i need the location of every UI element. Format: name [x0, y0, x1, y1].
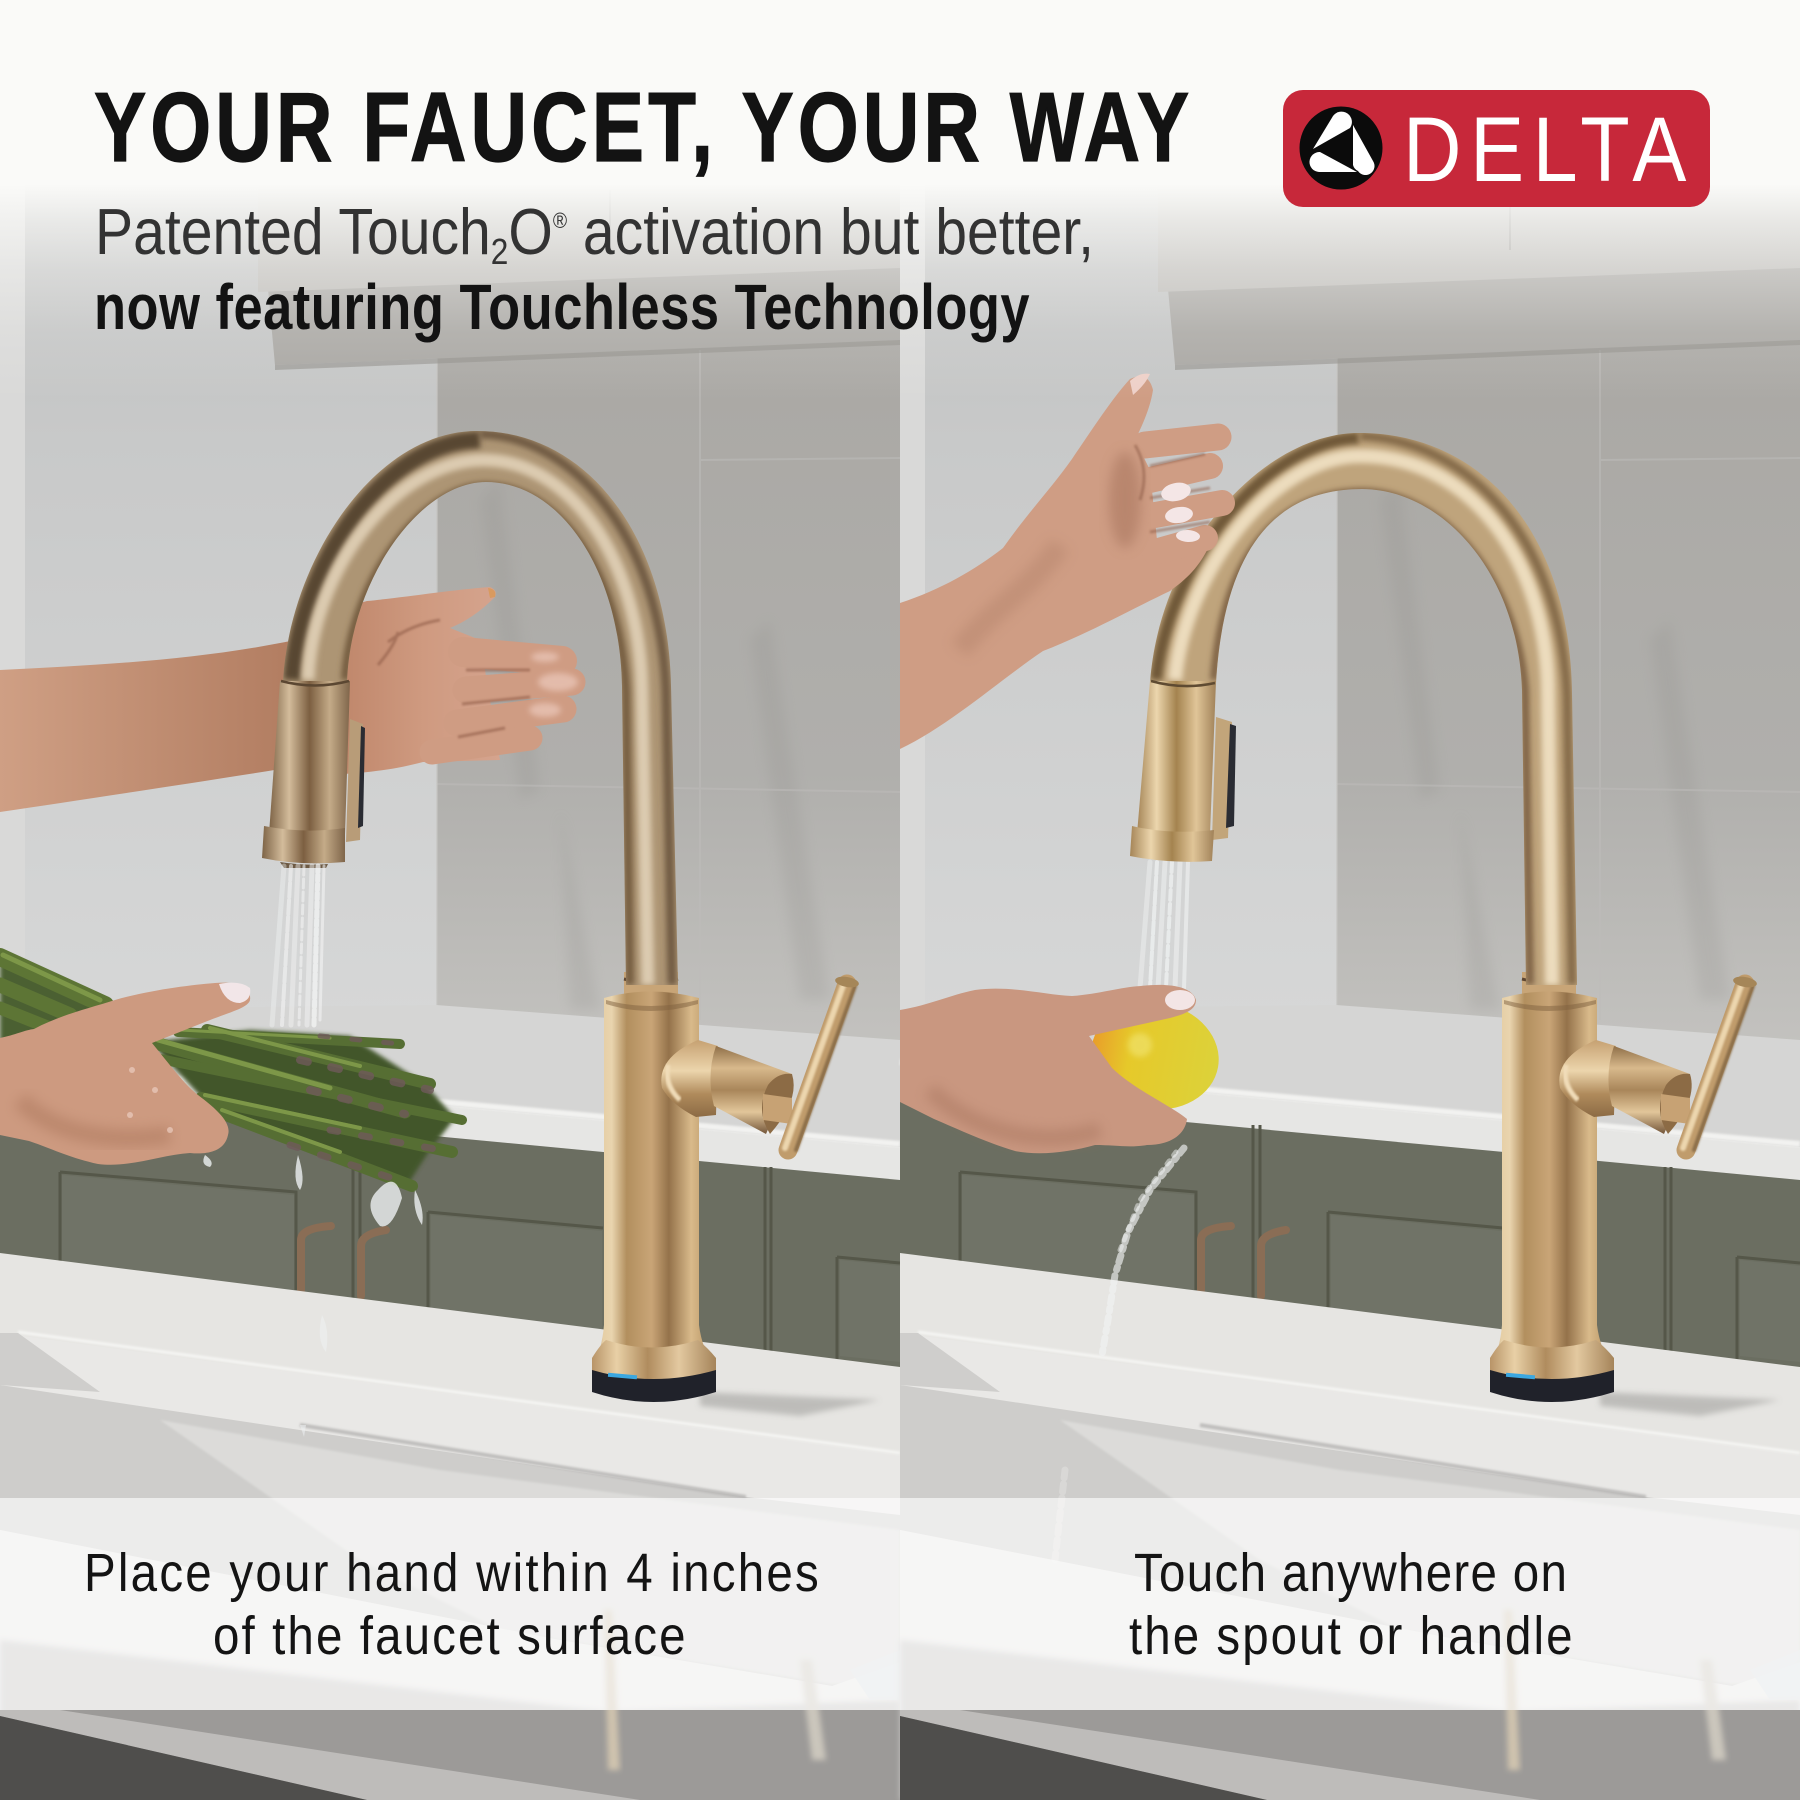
right lower hand holding lemon	[900, 985, 1196, 1153]
icon: Delta triangle emblem	[1300, 106, 1382, 190]
title: YOUR FAUCET, YOUR WAY	[94, 73, 1189, 182]
subtitle line 1: ®	[553, 208, 567, 233]
left lower hand holding asparagus	[0, 983, 250, 1165]
right spray head	[1130, 681, 1236, 862]
left faucet spout	[262, 431, 678, 985]
handle lever	[788, 984, 847, 1150]
subtitle line 1: activation but better,	[567, 195, 1094, 268]
left caption: Place your hand within 4 inches	[84, 1542, 819, 1603]
asparagus bundle	[0, 952, 462, 1186]
right lemon	[1083, 993, 1227, 1119]
left water spray	[272, 866, 324, 1025]
left falling water	[203, 1155, 423, 1437]
right faucet base and handle	[1490, 972, 1758, 1402]
left caption	[84, 1542, 819, 1666]
left faucet base and handle	[592, 972, 860, 1402]
subtitle line 2: now featuring Touchless Technology	[94, 272, 1030, 343]
right upper arm and touching hand	[900, 374, 1222, 749]
left spray head	[262, 681, 365, 868]
right water stream	[1055, 862, 1188, 1560]
panel: kitchen background (left)	[0, 0, 900, 1800]
right caption: the spout or handle	[1129, 1605, 1573, 1666]
top white fade	[0, 0, 1800, 400]
left caption band	[0, 1498, 900, 1710]
panel: kitchen background (right)	[900, 0, 1800, 1800]
left caption: of the faucet surface	[213, 1605, 686, 1666]
subtitle line 1: Patented Touch	[95, 195, 546, 268]
right caption	[1129, 1542, 1573, 1666]
subtitle	[94, 195, 1094, 343]
logo wordmark: DELTA	[1403, 99, 1687, 201]
subtitle line 1: O	[508, 195, 553, 268]
handle connector	[661, 1040, 794, 1134]
Delta logo	[1283, 90, 1710, 207]
subtitle line 1: 2	[491, 231, 508, 272]
right faucet spout	[1130, 433, 1577, 985]
right caption: Touch anywhere on	[1134, 1542, 1567, 1603]
left upper arm and open hand	[0, 587, 578, 812]
cabinet handles	[301, 1226, 386, 1296]
right caption band	[900, 1498, 1800, 1710]
